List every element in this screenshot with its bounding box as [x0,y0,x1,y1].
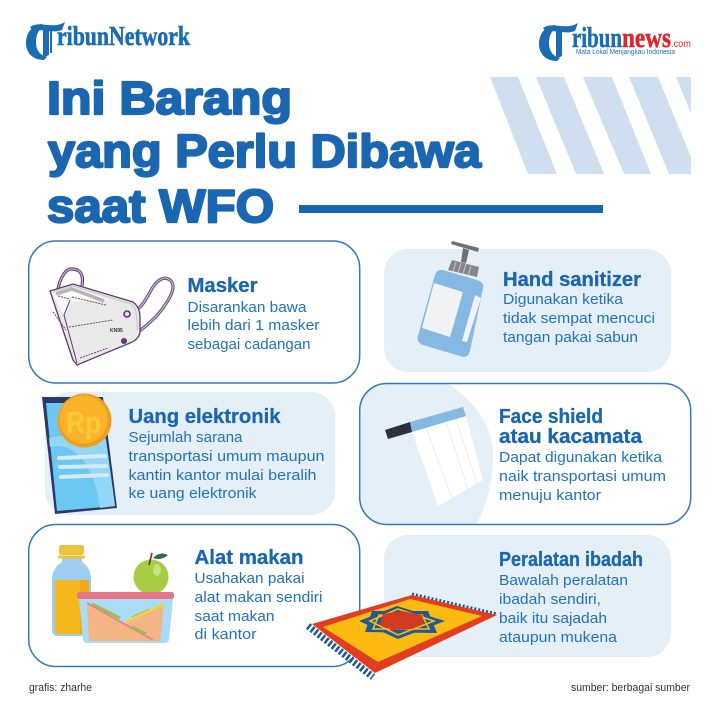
panel: uang elektronik [42,392,335,515]
icon: phone and coin: Rp [66,405,101,440]
text: peralatan ibadah: baik itu sajadah [499,610,607,627]
icon: phone and coin [42,394,117,514]
panel: face shield [350,380,691,527]
text: masker: sebagai cadangan [188,336,310,353]
icon: sanitizer bottle [418,241,483,357]
panel: alat makan [29,524,360,666]
text: face shield: naik transportasi umum [499,468,666,485]
text: face shield: menuju kantor [499,487,601,504]
heading: face shield: atau kacamata [499,426,643,448]
text: peralatan ibadah: ataupun mukena [499,629,618,646]
title: yang Perlu Dibawa [48,125,481,177]
panel: peralatan ibadah [384,535,671,657]
credit: grafis: grafis: zharhe [29,682,92,694]
heading: masker: Masker [188,275,258,297]
text: peralatan ibadah: Bawalah peralatan [499,572,628,589]
text: alat makan [194,570,322,643]
title: Ini Barang [47,72,292,124]
text: hand sanitizer [503,291,655,346]
text: alat makan: alat makan sendiri [194,589,322,606]
text: masker [188,299,320,353]
icon: bottle and lunch box [52,545,174,643]
heading: alat makan: Alat makan [194,547,304,569]
heading: hand sanitizer: Hand sanitizer [503,269,641,291]
logo: Tribunnews.com: Mata Lokal Menjangkau Indonesia [576,49,675,56]
title: saat WFO [47,180,274,232]
icon: face shield [385,407,483,506]
text: hand sanitizer: tidak sempat mencuci [503,310,655,327]
text: face shield: Dapat digunakan ketika [499,449,663,466]
text: uang elektronik: kantin kantor mulai beralih [128,467,316,484]
icon: face mask: KN95 [110,328,123,334]
text: masker: lebih dari 1 masker [188,317,320,334]
logo: Tribunnews.com: .com [671,39,691,50]
text: hand sanitizer: Digunakan ketika [503,291,624,308]
logo: Tribunnews.com: ribun [572,22,622,54]
logo: Tribunnews.com [539,22,691,61]
text: alat makan: di kantor [194,626,256,643]
text: peralatan ibadah: ibadah sendiri, [499,591,601,608]
icon: prayer rug [308,594,497,677]
text: hand sanitizer: tangan pakai sabun [503,329,638,346]
text: alat makan: saat makan [194,608,274,625]
heading: uang elektronik: Uang elektronik [128,406,281,428]
text: uang elektronik [128,429,324,502]
icon: face mask [50,269,173,365]
text: peralatan ibadah [499,572,628,646]
heading: peralatan ibadah: Peralatan ibadah [499,549,643,571]
text: face shield [499,449,666,504]
logo: Tribun Network: ribunNetwork [57,21,190,51]
text: uang elektronik: transportasi umum maupun [128,448,324,465]
panel: hand sanitizer [384,241,671,372]
text: uang elektronik: ke uang elektronik [128,485,257,502]
logo: Tribunnews.com: news [622,22,671,54]
panel: masker [29,241,360,383]
text: uang elektronik: Sejumlah sarana [128,429,243,446]
credit: sumber: sumber: berbagai sumber [571,682,690,694]
logo: Tribun Network [26,21,190,60]
text: alat makan: Usahakan pakai [194,570,304,587]
heading: face shield [499,406,643,448]
text: masker: Disarankan bawa [188,299,307,316]
title [47,72,481,232]
heading: face shield: Face shield [499,406,603,428]
